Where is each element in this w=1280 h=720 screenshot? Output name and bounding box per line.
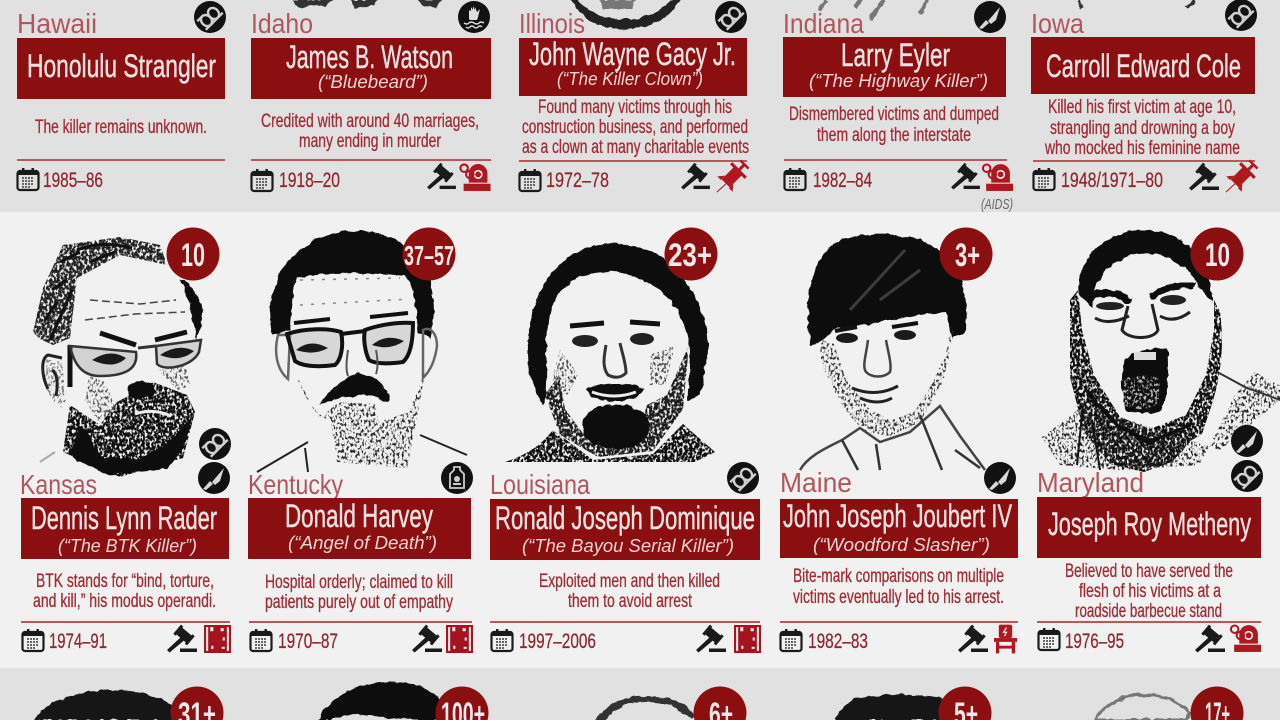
badges: bottom row: [170, 686, 1244, 720]
name box: [490, 499, 760, 560]
state label: Louisiana: [490, 469, 590, 500]
state label: Kentucky: [248, 469, 343, 500]
badge: 23+: 23+: [668, 237, 712, 273]
icon: syringe: [709, 156, 753, 200]
icon: drowning hand: [458, 1, 490, 33]
card: Kentucky: [248, 462, 473, 653]
description: flesh of his victims at a: [1079, 581, 1221, 602]
portrait: Dennis Rader: [33, 237, 203, 477]
badge: 100+: [436, 686, 488, 720]
icon: calendar: [18, 168, 38, 190]
badge: 23+: [664, 228, 718, 280]
name box: [251, 38, 491, 99]
icon: jail: [204, 625, 231, 653]
icon: knife: [1231, 425, 1263, 457]
note: (AIDS): [981, 196, 1013, 213]
badge: 5+: [938, 686, 992, 720]
description: The killer remains unknown.: [35, 117, 207, 138]
portrait: Joseph Metheny: [1042, 230, 1280, 472]
description: [33, 571, 216, 612]
badge: 17+: [1190, 686, 1244, 720]
name box: John Wayne Gacy Jr.: [529, 36, 736, 72]
badge: 3+: [940, 228, 992, 280]
icon: rope: [194, 1, 226, 33]
icon: calendar: [492, 629, 512, 651]
icon: rope: [199, 428, 231, 460]
state label: Idaho: [251, 8, 313, 39]
name box: [783, 37, 1006, 97]
name box: (“Woodford Slasher”): [813, 535, 990, 555]
icon: calendar: [784, 168, 806, 190]
description: victims eventually led to his arrest.: [793, 587, 1004, 608]
name box: [17, 38, 225, 99]
icon: knife: [974, 1, 1006, 33]
name box: (“The BTK Killer”): [58, 536, 197, 556]
icon: gavel: [951, 163, 980, 190]
badge: 31+: [170, 686, 224, 720]
card: Iowa: [1031, 0, 1262, 200]
name box: (“Bluebeard”): [318, 72, 428, 92]
description: Found many victims through his: [538, 97, 732, 118]
portraits: bottom row tops: [33, 682, 1190, 720]
icon: calendar: [780, 629, 802, 651]
description: roadside barbecue stand: [1075, 601, 1222, 622]
description: [793, 566, 1004, 608]
icon: calendar: [1034, 168, 1054, 190]
name box: [1031, 37, 1255, 94]
description: BTK stands for “bind, torture,: [36, 571, 214, 592]
icon: gas chamber: [983, 164, 1013, 191]
icon: gavel: [167, 625, 197, 652]
description: Hospital orderly; claimed to kill: [265, 572, 453, 593]
card: Idaho: [251, 1, 491, 192]
description: many ending in murder: [299, 131, 441, 152]
portrait fragments: top row: [292, 0, 1195, 29]
badge: 3+: 3+: [955, 237, 980, 273]
state label: Kansas: [20, 469, 97, 500]
badge: 10: 10: [1205, 237, 1230, 273]
description: [539, 571, 720, 612]
portrait: Donald Harvey: [257, 231, 467, 472]
description: [1044, 97, 1240, 159]
description: [522, 97, 749, 158]
state label: Indiana: [783, 8, 864, 39]
description: as a clown at many charitable events: [522, 137, 749, 158]
name box: [780, 498, 1018, 558]
icon: calendar: [1038, 628, 1060, 650]
name box: [248, 498, 471, 559]
icon: rope: [1231, 460, 1263, 492]
name box: Ronald Joseph Dominique: [495, 500, 755, 536]
name box: James B. Watson: [286, 39, 453, 75]
badge: 10: 10: [181, 237, 205, 273]
description: [789, 104, 999, 146]
years: 1976–95: [1065, 630, 1124, 653]
name box: [21, 498, 229, 559]
name box: (“The Highway Killer”): [809, 71, 988, 91]
icon: gavel: [958, 625, 988, 652]
state label: Maryland: [1037, 467, 1144, 498]
icon: gavel: [681, 163, 710, 190]
icon: calendar: [252, 169, 272, 191]
icon: gas chamber: [460, 164, 491, 191]
name box: Donald Harvey: [285, 498, 433, 534]
card: Illinois: [519, 1, 753, 200]
card: Indiana: [783, 1, 1013, 213]
portrait: John Joubert: [800, 234, 985, 470]
card: Kansas: [20, 428, 231, 653]
description: Bite-mark comparisons on multiple: [793, 566, 1004, 587]
icon: knife: [198, 462, 230, 494]
state label: Maine: [780, 467, 852, 498]
icon: electric chair: [994, 625, 1017, 653]
years: 1974–91: [49, 630, 107, 653]
description: and kill,” his modus operandi.: [33, 591, 216, 612]
badge: 10: [1190, 228, 1244, 280]
description: construction business, and performed: [522, 117, 748, 138]
name box: (“The Bayou Serial Killer”): [522, 536, 734, 556]
card: Maine: [780, 462, 1018, 653]
icon: gavel: [412, 625, 442, 652]
icon: jail: [734, 625, 761, 653]
description: Credited with around 40 marriages,: [261, 111, 479, 132]
icon: calendar: [22, 629, 44, 651]
badges: second row: [166, 228, 1244, 280]
icon: calendar: [250, 629, 272, 651]
name box: Dennis Lynn Rader: [31, 500, 217, 536]
state label: Illinois: [519, 8, 585, 39]
name box: (“The Killer Clown”): [557, 69, 703, 89]
badge: 10: [166, 228, 220, 280]
description: Exploited men and then killed: [539, 571, 720, 592]
icon: rope: [1225, 0, 1257, 31]
years: 1997–2006: [519, 630, 596, 653]
card: Hawaii: [17, 1, 226, 192]
years: 1918–20: [279, 169, 340, 192]
name box: Honolulu Strangler: [27, 48, 216, 84]
name box: [519, 36, 747, 96]
name box: Larry Eyler: [841, 37, 950, 73]
card: Louisiana: [490, 462, 761, 653]
description: [261, 111, 479, 152]
name box: (“Angel of Death”): [288, 533, 437, 553]
icon: knife: [984, 462, 1016, 494]
icon: gavel: [696, 625, 726, 652]
icon: poison bottle: [441, 462, 473, 494]
portrait: Ronald Dominique: [505, 243, 715, 462]
icon: calendar: [520, 169, 540, 191]
description: [1065, 561, 1233, 622]
name box: [1037, 497, 1261, 558]
state label: Hawaii: [17, 8, 97, 39]
icon: rope: [715, 1, 747, 33]
description: Dismembered victims and dumped: [789, 104, 999, 125]
badge: 37-57: 37–57: [404, 240, 454, 271]
name box: John Joseph Joubert IV: [783, 498, 1012, 534]
years: 1982–83: [808, 630, 868, 653]
years: 1970–87: [278, 630, 338, 653]
card: Maryland: [1037, 425, 1263, 653]
years: 1948/1971–80: [1061, 169, 1163, 192]
description: them along the interstate: [817, 125, 971, 146]
badge: 37-57: [402, 228, 456, 280]
description: patients purely out of empathy: [265, 592, 453, 613]
state label: Iowa: [1031, 8, 1084, 39]
icon: rope: [727, 462, 759, 494]
badge: 6+: [694, 686, 746, 720]
icon: syringe: [1218, 156, 1262, 200]
icon: gavel: [1195, 625, 1225, 652]
years: 1982–84: [813, 169, 872, 192]
description: [265, 572, 453, 613]
years: 1985–86: [43, 169, 103, 192]
description: them to avoid arrest: [568, 591, 693, 612]
years: 1972–78: [546, 169, 609, 192]
icon: jail: [446, 625, 473, 653]
icon: gavel: [427, 163, 456, 190]
icon: gavel: [1189, 163, 1219, 190]
icon: gas chamber: [1231, 625, 1261, 652]
